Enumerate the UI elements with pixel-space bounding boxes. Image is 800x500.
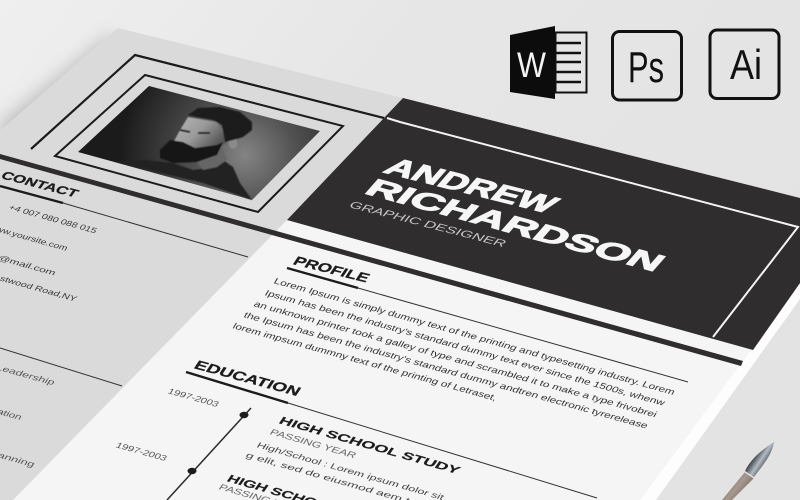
last name: RICHARDSON (359, 175, 671, 277)
profile section (231, 255, 688, 431)
skills section (0, 348, 122, 469)
profile rule (287, 268, 358, 288)
icon: word: W (517, 46, 546, 85)
profile paragraph: lorem impsum dummny text of the printing of Letraset, (231, 322, 499, 403)
education rule (186, 372, 288, 403)
neck (197, 147, 227, 170)
icon: photoshop: Ps (628, 43, 664, 92)
contact heading: CONTACT (0, 169, 82, 200)
profile paragraph: Lorem Ipsum is simply dummy text of the printing and typesetting industry. Lorem (272, 277, 677, 397)
icon: pen (722, 442, 774, 500)
dates (114, 387, 221, 463)
header white frame line (387, 118, 798, 337)
education entries: PASSING YEAR (268, 428, 358, 460)
contact details (0, 203, 99, 303)
contact section (0, 169, 248, 303)
first name: ANDREW (378, 154, 565, 219)
education entries (217, 415, 464, 500)
hair (188, 107, 252, 142)
contact rule (0, 186, 63, 203)
profile paragraph: Ipsum has been the industry's standard dummy text ever since the 1500s, whenw (263, 289, 668, 408)
timeline (167, 408, 251, 500)
education entries: High/School : Lorem ipsum dolor sit (255, 441, 446, 500)
skills rule (0, 348, 122, 386)
dates: 1997-2003 (166, 387, 221, 409)
thick divider (0, 154, 743, 366)
skills list (0, 363, 57, 469)
education heading: EDUCATION (191, 359, 303, 399)
icon: illustrator (710, 30, 779, 98)
header dark block (287, 98, 800, 350)
education section (114, 359, 597, 500)
face (173, 117, 226, 149)
photo frames (31, 55, 384, 212)
education entries: g elit, sed do eiusmod aem te (244, 451, 419, 500)
paper bright edge (640, 284, 800, 500)
hoodie (117, 160, 252, 200)
job title: GRAPHIC DESIGNER (346, 199, 510, 249)
paper shadow (0, 34, 120, 160)
name block (346, 154, 671, 277)
portrait photo (78, 86, 320, 200)
sidebar (0, 28, 403, 500)
contact details: +4 007 080 088 015 (7, 203, 99, 235)
profile heading: PROFILE (290, 255, 372, 286)
ear (228, 137, 238, 149)
profile paragraph: the Ipsum has been the industry's standard dummy andtren electronic tyrerelease (242, 311, 650, 431)
eyes (180, 130, 210, 133)
dates: 1997-2003 (114, 441, 169, 463)
education entries: HIGH SCHOOL STUDY (276, 415, 464, 477)
icon: photoshop (612, 32, 682, 100)
beard (160, 140, 223, 163)
icon: illustrator: Ai (730, 41, 762, 88)
profile paragraph (231, 277, 677, 431)
icon: word (510, 26, 586, 99)
profile paragraph: an unknown printer took a galley of type and scrambled it to make a type frivobrei (252, 300, 659, 420)
